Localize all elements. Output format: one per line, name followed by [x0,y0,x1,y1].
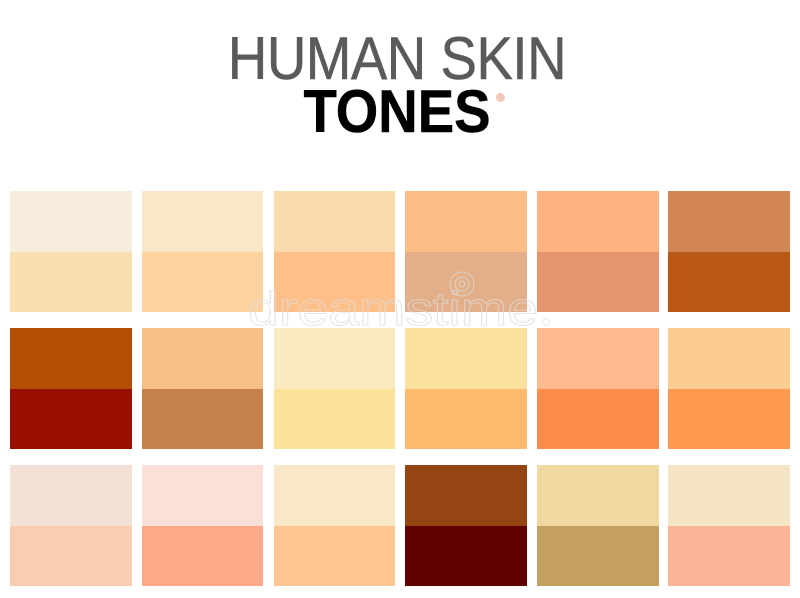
swatch row 2 column 3 [274,328,395,449]
swatch row 2 column 4 [405,328,527,449]
swatch row 1 column 3 [274,191,395,312]
swatch row 3 column 6 [668,465,790,586]
swatch row 1 column 6 [668,191,790,312]
swatch row 3 column 3 [274,465,395,586]
title: tones: TONES [303,78,491,145]
swatch row 1 column 4 [405,191,527,312]
swatch row 2 column 5 [537,328,659,449]
swatch row 2 column 6 [668,328,790,449]
swatch row 2 column 2 [142,328,263,449]
swatch row 1 column 5 [537,191,659,312]
swatch row 3 column 4 [405,465,527,586]
watermark: dreamstime [248,282,538,335]
swatch row 3 column 5 [537,465,659,586]
swatch row 1 column 2 [142,191,263,312]
swatch row 3 column 2 [142,465,263,586]
decorative dot [496,92,505,102]
swatch row 1 column 1 [10,191,132,312]
swatch row 3 column 1 [10,465,132,586]
swatch row 2 column 1 [10,328,132,449]
title: human skin: HUMAN SKIN [228,25,566,92]
